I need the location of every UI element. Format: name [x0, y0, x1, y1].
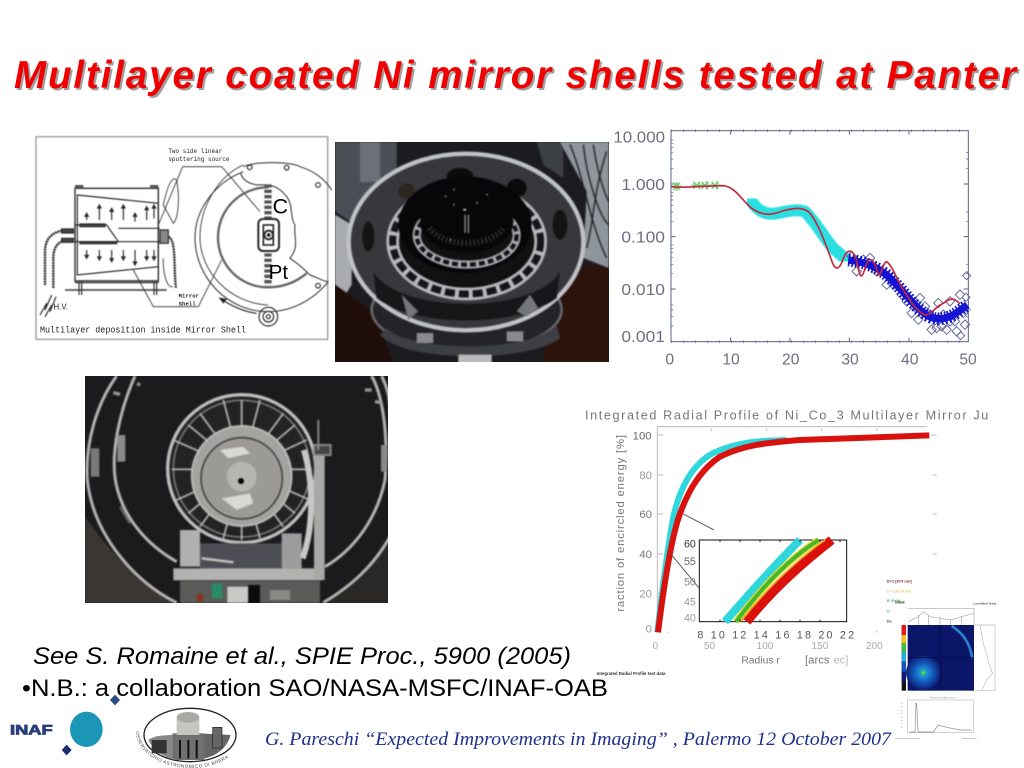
chart title: Integrated Radial Profile of Ni_Co_3 Multilayer Mirror Ju [585, 408, 988, 422]
x axis labels: Radius r [741, 655, 780, 666]
legend: Y = 18 eV cm [887, 589, 912, 594]
panel: multilayer deposition diagram: C [273, 195, 288, 219]
axis labels: 30 [841, 352, 859, 369]
outer ring [349, 154, 583, 330]
model curve [671, 186, 960, 315]
y axis labels: 60 [639, 509, 652, 521]
plot frame [671, 131, 968, 342]
axis labels: 0.001 [621, 329, 665, 346]
legend [887, 579, 997, 624]
leaders [133, 167, 260, 307]
panel: multilayer deposition diagram: H.V. [53, 302, 68, 311]
chamber rings [87, 376, 390, 603]
encircled energy curves [657, 440, 787, 632]
footer credit: G. Pareschi “Expected Improvements in Imaging” , Palermo 12 October 2007 [265, 730, 892, 750]
x axis labels: 150 [812, 641, 829, 652]
panel: multilayer deposition diagram: Two side linear [168, 148, 223, 155]
text: reference citation: See S. Romaine et al., SPIE Proc., 5900 (2005) [33, 643, 571, 670]
y axis labels: 0 [646, 623, 652, 635]
inner slotted ring [417, 206, 517, 265]
axis labels: 50 [959, 352, 977, 369]
y axis labels: 20 [639, 588, 652, 600]
blue data [848, 260, 967, 319]
inset plot [684, 538, 854, 641]
pointer lines [672, 514, 714, 602]
lower profile: Projected Spectrum [930, 696, 957, 700]
y axis labels: 80 [639, 470, 652, 482]
logo: Osservatorio Astronomico di Brera [136, 708, 237, 768]
large disk [195, 172, 328, 312]
cyan data [752, 202, 845, 258]
legend: De [887, 619, 893, 624]
x axis labels: 0 [653, 641, 659, 652]
legend: Lost Merit Track [973, 602, 997, 606]
shell body [75, 188, 158, 282]
photo: mirror module mounted in Panter chamber [85, 376, 388, 603]
y axis labels: raction of encircled energy [%] [615, 435, 627, 612]
inset plot: 50 [684, 576, 696, 588]
big slotted ring [393, 189, 541, 294]
legend: G [887, 608, 890, 613]
panel: multilayer deposition diagram: Shell [179, 300, 196, 307]
x axis labels: 100 [757, 641, 774, 652]
panel: multilayer deposition diagram: Mirror [179, 292, 199, 299]
y axis labels: 100 [633, 430, 652, 442]
inset plot: 60 [684, 538, 696, 550]
blue diamonds [847, 252, 971, 340]
axis labels: 1.000 [621, 177, 665, 194]
colour map [908, 625, 974, 691]
logo: INAF: INAF [10, 722, 53, 737]
legend: D=1 [874 um] [887, 579, 912, 584]
photo: mirror module with spoked rings [335, 142, 609, 362]
green asterisks [672, 181, 722, 191]
y axis labels: 40 [639, 549, 652, 561]
axis labels: 10.000 [613, 130, 665, 147]
x axis labels [653, 641, 883, 666]
axis labels: 0.100 [621, 230, 665, 247]
cables [45, 230, 70, 288]
lower interior [373, 271, 560, 320]
axis labels: 0 [665, 352, 674, 369]
panel: multilayer deposition diagram [34, 135, 332, 341]
spoked wheel [168, 395, 316, 543]
image plot: focal spot map with legend and profiles [886, 579, 997, 739]
axis labels: 0.010 [621, 282, 665, 299]
inset plot: 40 [684, 612, 696, 624]
axis labels [613, 130, 977, 369]
axis labels: 20 [782, 352, 800, 369]
mount [180, 530, 200, 567]
x axis labels: 50 [704, 641, 716, 652]
axes [657, 427, 937, 633]
inset plot: 45 [684, 596, 696, 608]
title: Multilayer coated Ni mirror shells tested at Panter [16, 56, 1020, 99]
panel: multilayer deposition diagram: Multilayer deposition inside Mirror Shell [40, 325, 246, 335]
logo: INAF [10, 694, 120, 756]
right profile [975, 625, 995, 691]
axis labels: 10 [722, 352, 740, 369]
legend: G Yield [887, 598, 901, 603]
inset plot: 55 [684, 556, 696, 568]
legend: ON/ME [895, 601, 905, 605]
small credit text: Integrated Radial Profile test data [597, 671, 666, 676]
chart: reflectivity versus angle [613, 129, 977, 369]
panel: multilayer deposition diagram: Pt [269, 261, 288, 284]
text: collaboration note: •N.B.: a collaboration SAO/NASA-MSFC/INAF-OAB [22, 675, 608, 702]
sputter source [257, 184, 279, 286]
title: Multilayer coated Ni mirror shells tested at Panter [14, 54, 1018, 97]
drive wheel [259, 307, 278, 326]
panel: multilayer deposition diagram: sputtering source [168, 156, 230, 163]
axis labels: 40 [901, 352, 919, 369]
colour bar [902, 625, 906, 691]
top profile [908, 608, 974, 625]
high voltage [40, 295, 56, 317]
logo: Osservatorio Astronomico di Brera: OSSERVATORIO ASTRONOMICO DI BRERA [136, 732, 228, 768]
x axis labels: ec] [833, 654, 848, 666]
y axis labels [615, 430, 652, 635]
inset plot: 8 10 12 14 16 18 20 22 [697, 629, 854, 641]
x axis labels: [arcs [805, 654, 830, 666]
chart: integrated radial profile [585, 408, 988, 676]
x axis labels: 200 [866, 641, 883, 652]
lower profile [895, 696, 977, 738]
lower assembly [372, 268, 562, 351]
